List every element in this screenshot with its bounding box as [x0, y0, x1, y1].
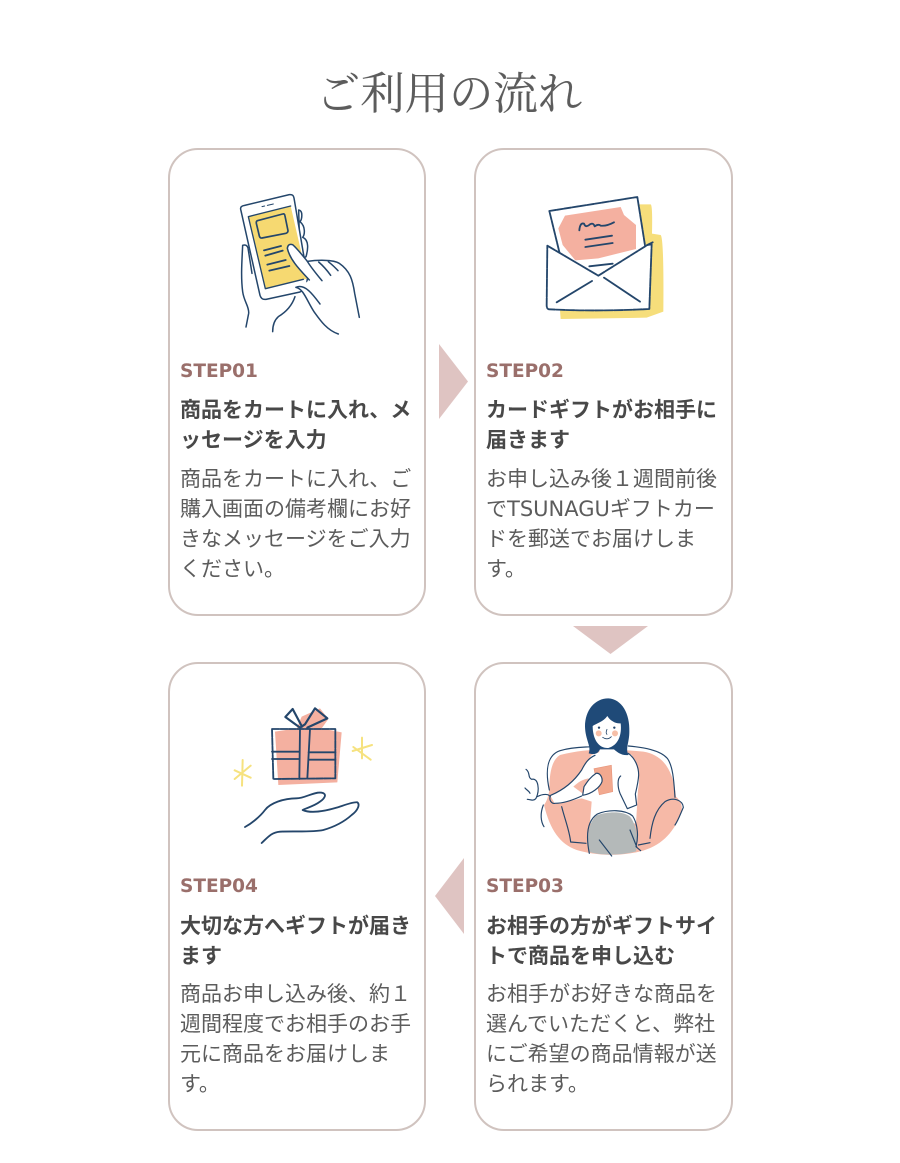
text: step 04: す。	[180, 1072, 220, 1096]
label: step 04: STEP04	[180, 876, 258, 897]
heading: step 03	[486, 910, 717, 970]
title: ご利用の流れ	[316, 69, 582, 119]
heading: step 01: ッセージを入力	[180, 424, 327, 454]
heading: step 03: お相手の方がギフトサイ	[486, 910, 717, 940]
icon: woman on sofa with smartphone	[524, 698, 684, 857]
heading: step 04: ます	[180, 940, 222, 970]
text: step 03	[486, 982, 717, 1096]
text: step 02	[486, 467, 717, 581]
text: step 01: 商品をカートに入れ、ご	[180, 467, 411, 491]
text: step 04: 商品お申し込み後、約１	[180, 982, 411, 1006]
panel: step 04	[168, 662, 426, 1131]
label: step 03: STEP03	[486, 876, 564, 897]
text: step 03: 選んでいただくと、弊社	[486, 1012, 715, 1036]
text: step 04: 元に商品をお届けしま	[180, 1042, 390, 1066]
text: step 01	[180, 467, 411, 581]
text: step 01: きなメッセージをご入力	[180, 527, 411, 551]
icon: envelope with card	[546, 196, 664, 319]
arrow: step 01 to step 02	[439, 344, 468, 419]
text: step 03: お相手がお好きな商品を	[486, 982, 717, 1006]
panel: step 02	[474, 148, 733, 616]
heading: step 03: トで商品を申し込む	[486, 940, 675, 970]
heading: step 02: カードギフトがお相手に	[486, 394, 717, 424]
panel: step 03	[474, 662, 733, 1131]
heading: step 02	[486, 394, 717, 454]
arrow: step 02 to step 03	[573, 626, 648, 654]
arrow: step 03 to step 04	[435, 858, 464, 934]
text: step 02: お申し込み後１週間前後	[486, 467, 717, 491]
icon: hands holding smartphone	[240, 194, 360, 335]
label: step 02: STEP02	[486, 361, 564, 382]
text: step 03: られます。	[486, 1072, 589, 1096]
heading: step 01: 商品をカートに入れ、メ	[180, 394, 411, 424]
text: step 04: 週間程度でお相手のお手	[180, 1012, 411, 1036]
icon: gift on open hand	[234, 707, 373, 844]
text: step 03: にご希望の商品情報が送	[486, 1042, 717, 1066]
text: step 01: ください。	[180, 557, 285, 581]
text: step 04	[180, 982, 411, 1096]
label: step 01: STEP01	[180, 361, 258, 382]
text: step 02: す。	[486, 557, 526, 581]
text: step 02: ドを郵送でお届けしま	[486, 527, 696, 551]
heading: step 02: 届きます	[486, 424, 570, 454]
text: step 02: でTSUNAGUギフトカー	[486, 497, 715, 521]
heading: step 04	[180, 910, 411, 970]
panel: step 01	[168, 148, 426, 616]
heading: step 01	[180, 394, 411, 454]
heading: step 04: 大切な方へギフトが届き	[180, 910, 411, 940]
text: step 01: 購入画面の備考欄にお好	[180, 497, 411, 521]
